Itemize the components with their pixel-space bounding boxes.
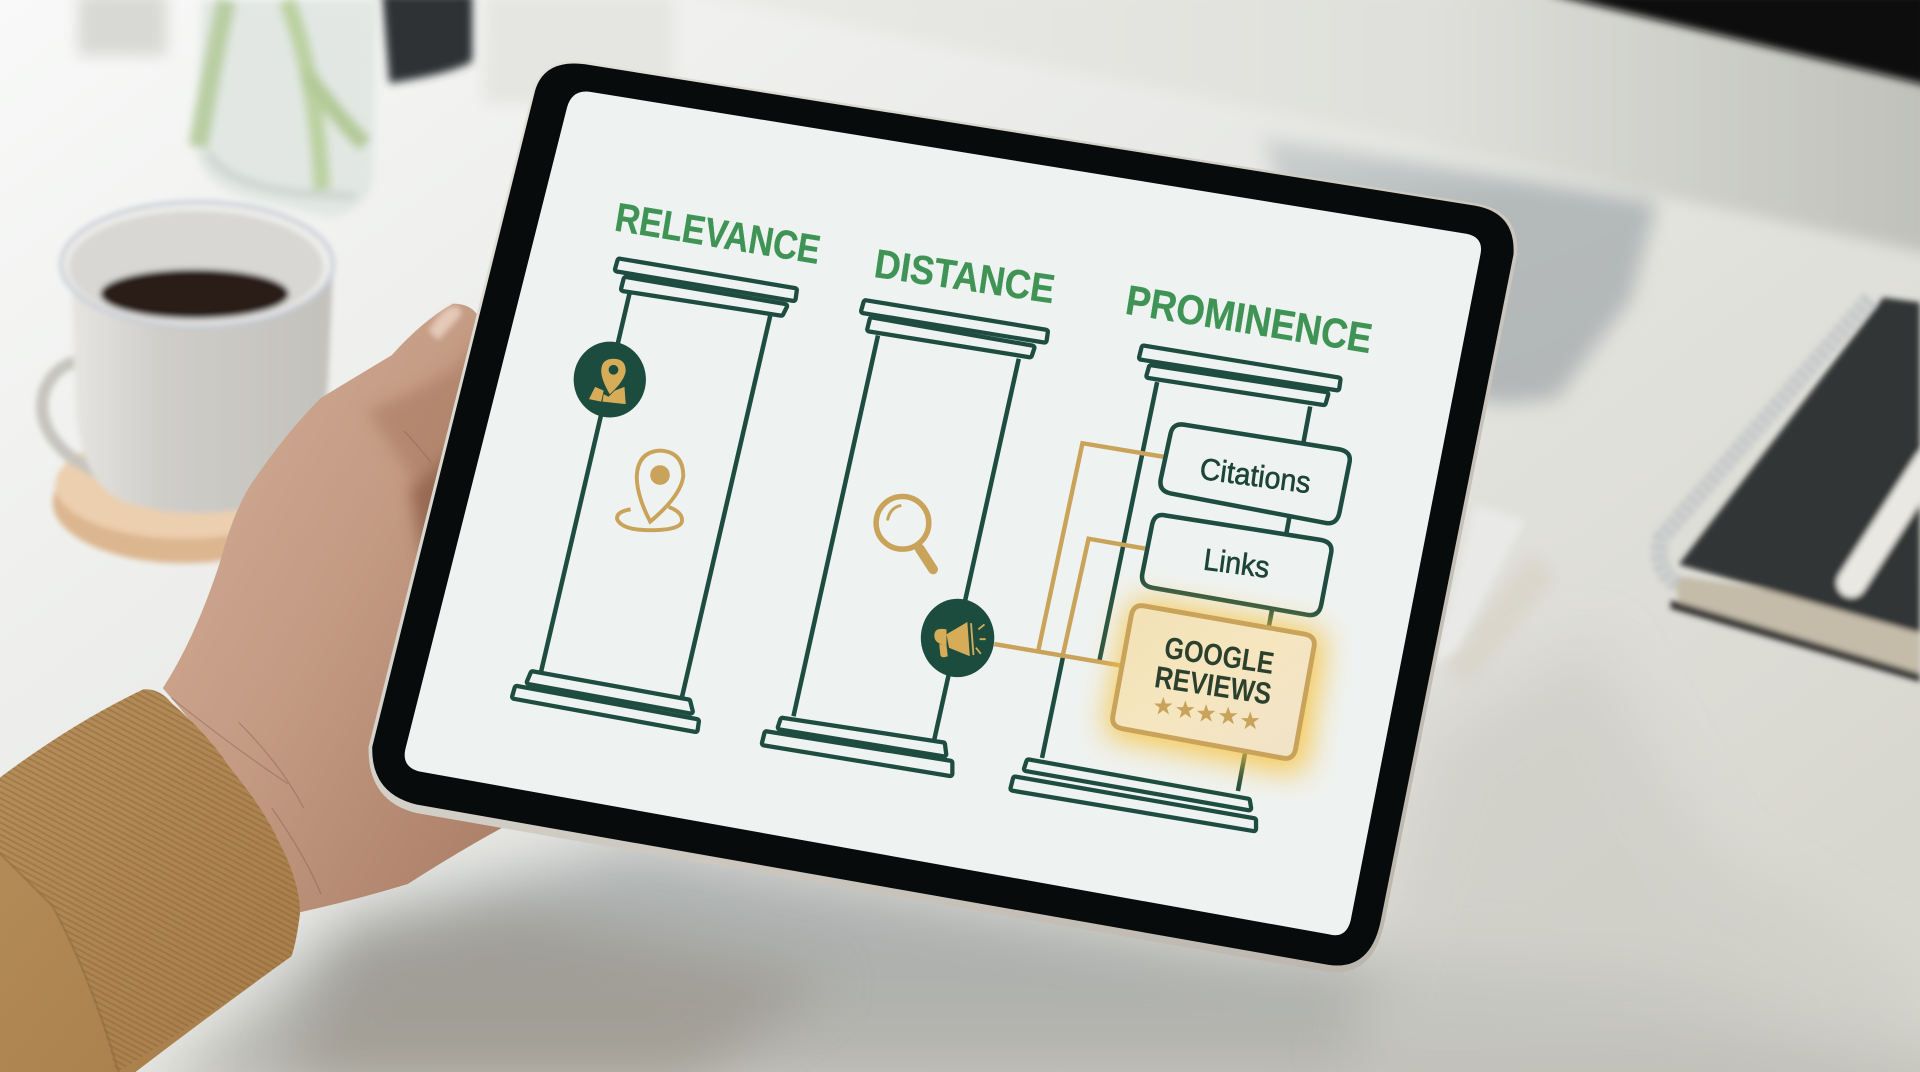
tablet shell xyxy=(369,61,1517,973)
box: Citations xyxy=(1160,424,1350,523)
wrinkles xyxy=(171,431,431,894)
box: Links: Links xyxy=(1202,543,1272,585)
icon: megaphone badge xyxy=(921,599,994,677)
box: Citations: Citations xyxy=(1198,452,1313,500)
box: Links xyxy=(1142,515,1331,615)
nail xyxy=(429,306,461,340)
pages xyxy=(1674,575,1920,676)
monitor edge xyxy=(1544,0,1920,86)
sweater sleeve xyxy=(0,689,300,1072)
coffee xyxy=(100,269,289,318)
tablet device xyxy=(369,61,1517,973)
monitor base, blurred xyxy=(1261,137,1657,404)
window and background objects xyxy=(78,0,673,218)
star rating xyxy=(1154,697,1260,729)
hand holding the tablet xyxy=(163,304,504,912)
heading: PROMINENCE: PROMINENCE xyxy=(1123,276,1376,362)
icon: location pin xyxy=(617,451,683,530)
dark object xyxy=(382,0,473,83)
notebook and pen xyxy=(1659,298,1920,682)
thumb shading xyxy=(367,337,480,484)
mug body xyxy=(71,269,333,513)
highlighted box: Google Reviews: REVIEWS xyxy=(1152,660,1274,711)
coaster xyxy=(53,441,315,563)
coffee mug on coaster xyxy=(42,202,333,563)
heading: RELEVANCE: RELEVANCE xyxy=(612,194,824,273)
window frame xyxy=(78,0,167,55)
handle xyxy=(42,361,125,487)
glass vase xyxy=(196,0,377,218)
tablet bezel xyxy=(372,64,1514,965)
pen xyxy=(1851,463,1920,583)
spiral xyxy=(1659,299,1870,585)
keyboard, blurred xyxy=(1433,506,1558,686)
rim xyxy=(61,202,333,327)
icon: magnifying glass xyxy=(876,497,933,569)
pillar: distance xyxy=(764,302,1046,774)
highlighted box: Google Reviews: GOOGLE xyxy=(1162,631,1276,681)
cover xyxy=(1679,298,1920,633)
pillar: relevance xyxy=(514,261,795,730)
heading: DISTANCE: DISTANCE xyxy=(872,240,1058,312)
highlighted box: Google Reviews xyxy=(1104,600,1325,774)
pillar: prominence xyxy=(1013,348,1338,829)
block behind vase xyxy=(484,0,673,104)
connector lines from badge to factor boxes xyxy=(994,443,1163,666)
tablet screen xyxy=(405,92,1481,935)
icon: map pin badge xyxy=(574,342,646,418)
